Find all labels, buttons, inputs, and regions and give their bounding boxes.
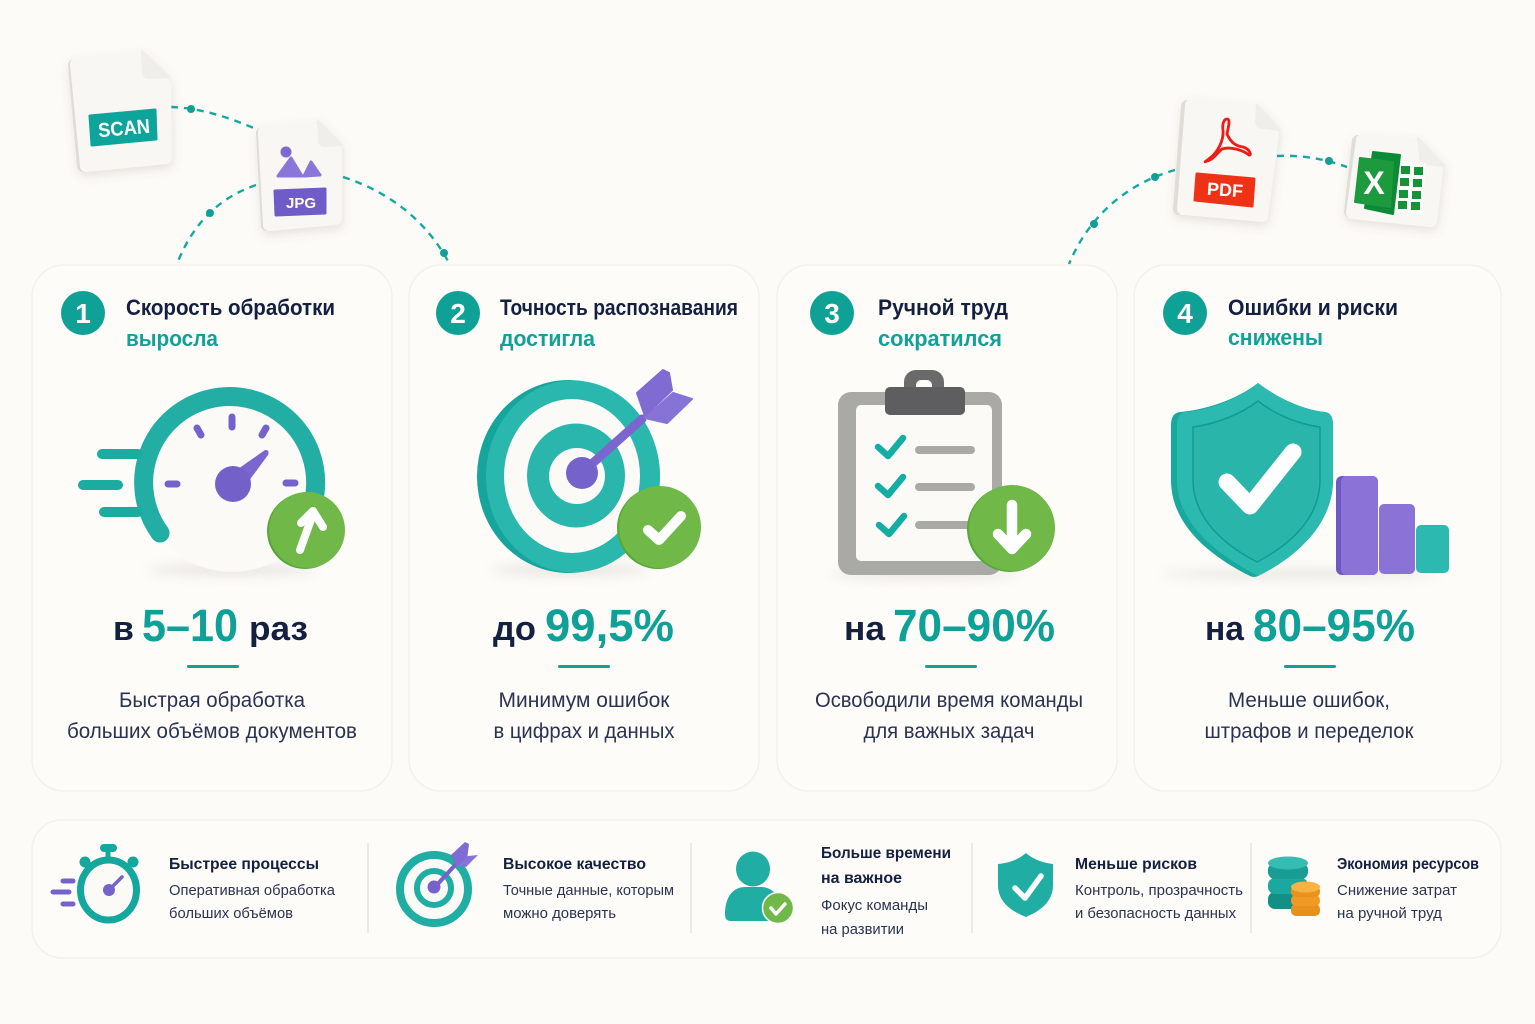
stat: 5-10 times: в	[113, 610, 134, 648]
badge 4	[1163, 291, 1207, 335]
panel: manual labour	[777, 265, 1117, 791]
heading: labour	[878, 295, 1008, 351]
description	[67, 689, 357, 743]
stat: 70-90%: 70–90%	[893, 600, 1055, 651]
text: resource savings: Снижение затрат	[1337, 882, 1457, 899]
text: more time: Фокус команды	[821, 897, 928, 914]
description: Минимум ошибок	[498, 689, 670, 712]
panel: accuracy	[409, 265, 759, 791]
text: faster processes: Оперативная обработка	[169, 882, 336, 899]
text: high quality: Точные данные, которым	[503, 882, 674, 899]
text: faster processes: Быстрее процессы	[169, 856, 319, 873]
stat: 70-90%: на	[844, 610, 886, 648]
badge 2: 2	[450, 298, 466, 329]
description: Меньше ошибок,	[1228, 689, 1390, 712]
stat: up to 99.5%: 99,5%	[545, 600, 674, 651]
icon: SCAN file	[74, 51, 169, 166]
icon: PDF file	[1179, 105, 1280, 216]
icon: small shield	[998, 853, 1053, 917]
text: resource savings: Экономия ресурсов	[1337, 856, 1479, 873]
description: штрафов и переделок	[1204, 720, 1414, 743]
panel: benefits strip	[32, 820, 1501, 958]
connector: dashed lines right	[1069, 156, 1347, 264]
text: faster processes: больших объёмов	[169, 905, 293, 922]
badge 2	[436, 291, 480, 335]
icon: stopwatch	[53, 844, 138, 920]
heading: accuracy	[500, 295, 738, 351]
icon: shield with bars	[1160, 383, 1449, 578]
panel: speed	[32, 265, 392, 791]
badge 3	[810, 291, 854, 335]
heading: risks	[1228, 295, 1398, 350]
icon: small target	[400, 842, 478, 923]
badge 4: 4	[1177, 298, 1193, 329]
description: Освободили время команды	[815, 689, 1083, 712]
stat: 5-10 times: раз	[249, 610, 308, 648]
badge 3: 3	[824, 298, 840, 329]
icon: coins stack	[1268, 856, 1320, 916]
text: more time: Больше времени	[821, 845, 951, 862]
heading: accuracy: Точность распознавания	[500, 295, 738, 320]
text: high quality	[503, 856, 674, 922]
description: для важных задач	[864, 720, 1034, 743]
heading: risks: снижены	[1228, 325, 1323, 350]
text: more time	[821, 845, 951, 938]
icon: clipboard	[830, 370, 1055, 578]
icon: JPG file	[262, 121, 342, 225]
heading: risks: Ошибки и риски	[1228, 295, 1398, 320]
text: more time: на важное	[821, 870, 902, 887]
text: resource savings: на ручной труд	[1337, 905, 1442, 922]
text: resource savings	[1337, 856, 1479, 922]
connector: dashed lines left	[171, 105, 450, 265]
heading: labour: Ручной труд	[878, 295, 1008, 320]
icon: speedometer	[83, 388, 345, 575]
heading: labour: сократился	[878, 326, 1002, 351]
description	[815, 689, 1083, 743]
text: fewer risks: и безопасность данных	[1075, 905, 1236, 922]
text: high quality: можно доверять	[503, 905, 616, 922]
heading: accuracy: достигла	[500, 326, 596, 351]
badge 1: 1	[75, 298, 91, 329]
text: high quality: Высокое качество	[503, 856, 646, 873]
description	[494, 689, 675, 743]
icon: JPG file: JPG	[286, 195, 316, 212]
text: fewer risks: Контроль, прозрачность	[1075, 882, 1243, 899]
badge 1	[61, 291, 105, 335]
heading: speed: выросла	[126, 326, 219, 351]
stat: 80-95%: 80–95%	[1253, 600, 1415, 651]
heading: speed	[126, 295, 335, 351]
stat: 5-10 times	[113, 600, 308, 651]
description: больших объёмов документов	[67, 720, 357, 743]
description	[1204, 689, 1414, 743]
icon: Excel file: X	[1363, 165, 1385, 201]
text: more time: на развитии	[821, 921, 904, 938]
icon: SCAN file: SCAN	[97, 116, 151, 142]
stat: up to 99.5%: до	[493, 610, 536, 648]
text: faster processes	[169, 856, 336, 922]
icon: PDF file: PDF	[1206, 179, 1244, 201]
description: в цифрах и данных	[494, 720, 675, 743]
stat: 80-95%: на	[1205, 610, 1245, 648]
icon: target	[477, 370, 701, 575]
panel: errors and risks	[1134, 265, 1501, 791]
stat: 5-10 times: 5–10	[142, 600, 238, 651]
text: fewer risks	[1075, 856, 1243, 922]
text: fewer risks: Меньше рисков	[1075, 856, 1197, 873]
icon: Excel file	[1350, 138, 1444, 221]
description: Быстрая обработка	[119, 689, 305, 712]
heading: speed: Скорость обработки	[126, 295, 335, 320]
icon: person with check	[725, 852, 794, 924]
